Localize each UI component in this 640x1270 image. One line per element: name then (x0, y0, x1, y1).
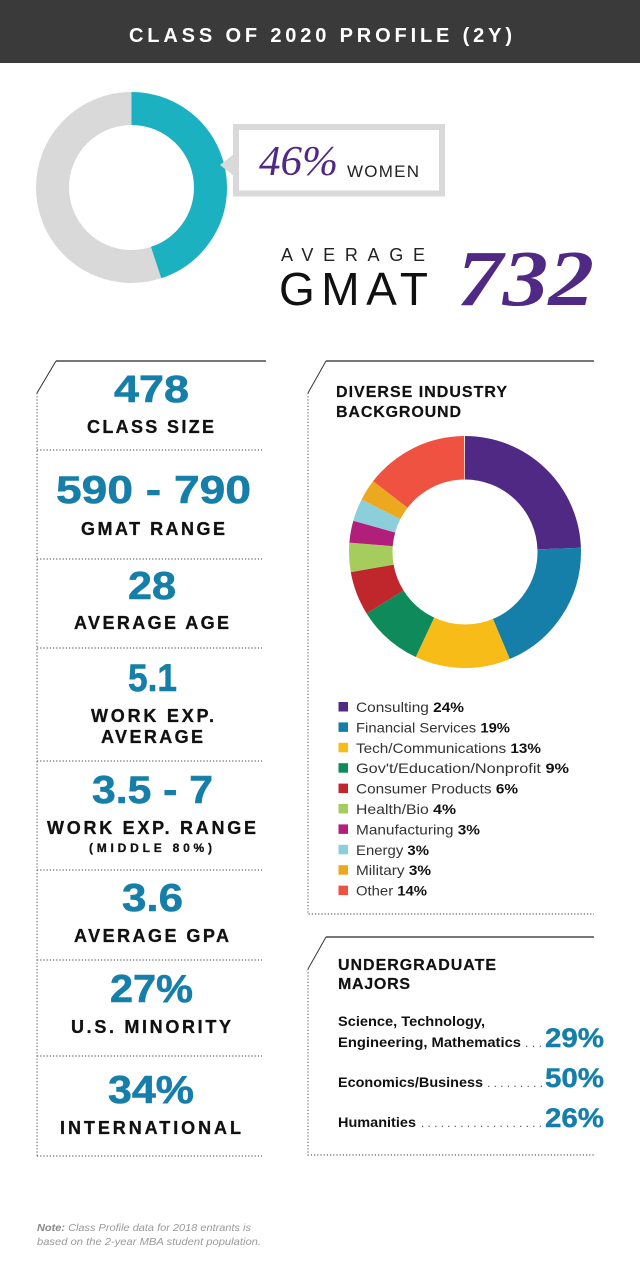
row: humanities 26%: ................... (421, 1116, 542, 1130)
stat: work experience range: 3.5 - 7 (92, 769, 213, 812)
stat: work experience average (91, 657, 214, 747)
legend: Other 14% (356, 883, 428, 899)
footnote: based on the 2-year MBA student population. (37, 1236, 261, 1248)
stat: work experience range: (MIDDLE 80%) (89, 841, 212, 855)
stat: average age: 28 (128, 565, 176, 608)
row: economics/business 50% (338, 1063, 604, 1093)
stat: GMAT range: GMAT RANGE (81, 519, 225, 539)
stat: class size (87, 369, 214, 437)
panel: diverse industry background (308, 361, 594, 914)
callout: 46% women (220, 127, 442, 194)
panel: undergraduate majors (308, 937, 604, 1155)
stat: work experience range (47, 769, 256, 855)
legend: Consumer Products 6% (356, 781, 519, 797)
row: STEM 29%: ... (525, 1036, 542, 1050)
legend: Manufacturing 3% (356, 821, 481, 837)
average GMAT: 732 (457, 236, 594, 323)
footnote (37, 1222, 261, 1248)
heading (338, 957, 496, 993)
stat: class size: CLASS SIZE (87, 417, 214, 437)
stat: work experience average: AVERAGE (101, 727, 203, 747)
row: humanities 26% (338, 1103, 604, 1133)
stat: GMAT range: 590 - 790 (56, 469, 251, 512)
panel: class statistics (37, 361, 266, 1156)
stat: average age: AVERAGE AGE (74, 613, 229, 633)
row: economics/business 50%: ......... (487, 1076, 543, 1090)
title banner: CLASS OF 2020 PROFILE (2Y) (129, 25, 512, 47)
footnote: Note: Class Profile data for 2018 entrants is (37, 1222, 252, 1234)
legend: Health/Bio 4% (356, 801, 457, 817)
average GMAT: GMAT (279, 263, 428, 315)
legend: Financial Services 19% (356, 719, 511, 735)
row: economics/business 50%: 50% (545, 1063, 604, 1093)
legend: Energy 3% (356, 842, 430, 858)
callout: 46% women: WOMEN (347, 162, 419, 181)
stat: average age (74, 565, 229, 633)
stat: average GPA: AVERAGE GPA (74, 926, 229, 946)
row: STEM 29%: 29% (545, 1023, 604, 1053)
row: economics/business 50%: Economics/Business (338, 1074, 483, 1090)
stat: work experience range: WORK EXP. RANGE (47, 818, 256, 838)
callout: 46% women: 46% (259, 139, 338, 185)
title banner (0, 0, 640, 63)
stat: U.S. minority (71, 968, 231, 1037)
legend: Gov't/Education/Nonprofit 9% (356, 760, 570, 776)
heading: MAJORS (338, 976, 410, 993)
legend: Consulting 24% (356, 699, 465, 715)
stat: average GPA (74, 877, 229, 946)
row: STEM 29%: Engineering, Mathematics (338, 1034, 521, 1050)
heading (336, 384, 507, 421)
stat: GMAT range (56, 469, 251, 539)
heading: BACKGROUND (336, 404, 461, 421)
heading: DIVERSE INDUSTRY (336, 384, 507, 401)
row: STEM 29%: Science, Technology, (338, 1013, 485, 1029)
stat: international: 34% (108, 1069, 194, 1112)
donut chart: industries (371, 458, 559, 646)
row: STEM 29% (338, 1013, 604, 1053)
stat: U.S. minority: U.S. MINORITY (71, 1017, 231, 1037)
legend: Tech/Communications 13% (356, 740, 542, 756)
legend (338, 699, 570, 899)
stat: class size: 478 (114, 369, 189, 411)
stat: average GPA: 3.6 (122, 877, 183, 920)
average GMAT (279, 236, 594, 323)
stat: work experience average: WORK EXP. (91, 706, 214, 726)
row: humanities 26%: Humanities (338, 1114, 416, 1130)
heading: UNDERGRADUATE (338, 957, 496, 974)
stat: work experience average: 5.1 (128, 657, 177, 700)
stat: U.S. minority: 27% (110, 968, 193, 1011)
donut chart: women share (52, 108, 210, 266)
row: humanities 26%: 26% (545, 1103, 604, 1133)
average GMAT: AVERAGE (281, 245, 425, 265)
stat: international: INTERNATIONAL (60, 1118, 241, 1138)
stat: international (60, 1069, 241, 1138)
legend: Military 3% (356, 862, 432, 878)
